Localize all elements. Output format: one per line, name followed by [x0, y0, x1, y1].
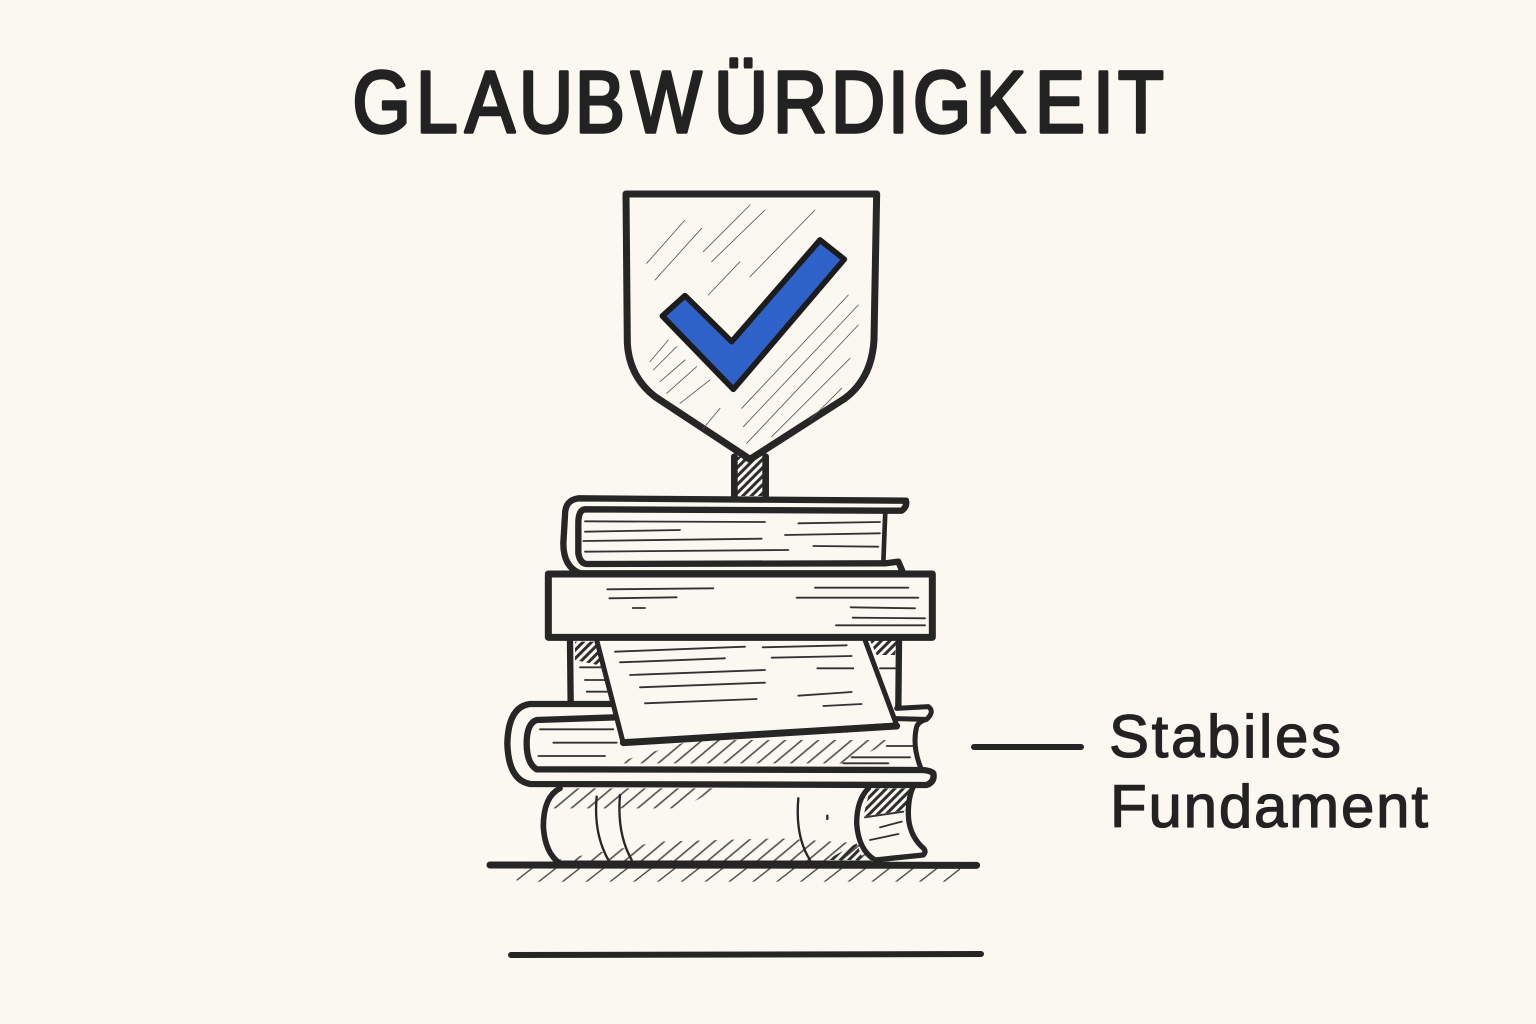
bottom line — [511, 954, 981, 955]
book 3: tilted pages — [597, 640, 897, 743]
icon: shield with check mark — [626, 194, 877, 496]
label: Stabiles Fundament: Stabiles — [1109, 703, 1341, 770]
ground line — [490, 865, 977, 882]
title: GLAUBWÜRDIGKEIT — [353, 55, 1164, 151]
check mark — [662, 240, 844, 389]
label connector line — [974, 744, 1081, 750]
shield outline — [626, 194, 877, 459]
book 5: bottom book — [543, 787, 925, 863]
label: Stabiles Fundament — [1109, 703, 1428, 840]
shield hatching — [647, 205, 858, 443]
book 3: back cover of tilted book — [570, 640, 899, 707]
book 1: top book — [563, 498, 906, 573]
book 4: lying book — [507, 704, 934, 785]
label: Stabiles Fundament: Fundament — [1110, 773, 1428, 840]
book 2: flat book — [548, 574, 932, 637]
shield stem — [734, 457, 766, 496]
stack of books — [490, 498, 977, 882]
